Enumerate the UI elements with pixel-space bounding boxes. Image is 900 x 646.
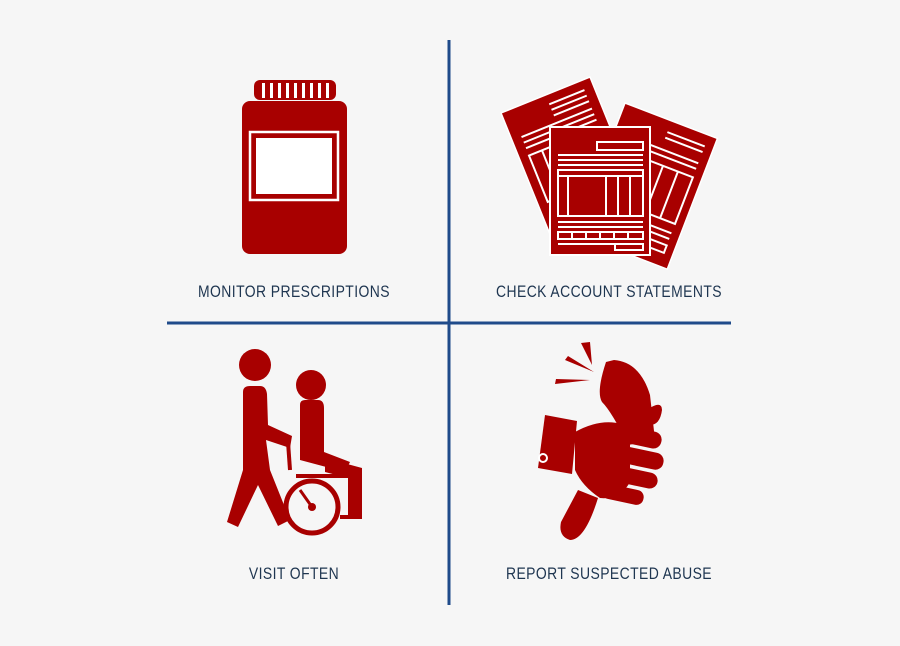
icon: account statements [500, 76, 718, 270]
icon: prescription bottle [242, 80, 347, 254]
label: visit often: VISIT OFTEN [249, 564, 339, 583]
icon: visiting wheelchair [227, 349, 362, 536]
label: check account statements: CHECK ACCOUNT STATEMENTS [496, 282, 722, 301]
icon: phone in hand [538, 342, 664, 540]
label: report suspected abuse: REPORT SUSPECTED ABUSE [506, 564, 712, 583]
label: monitor prescriptions: MONITOR PRESCRIPTIONS [198, 282, 390, 301]
